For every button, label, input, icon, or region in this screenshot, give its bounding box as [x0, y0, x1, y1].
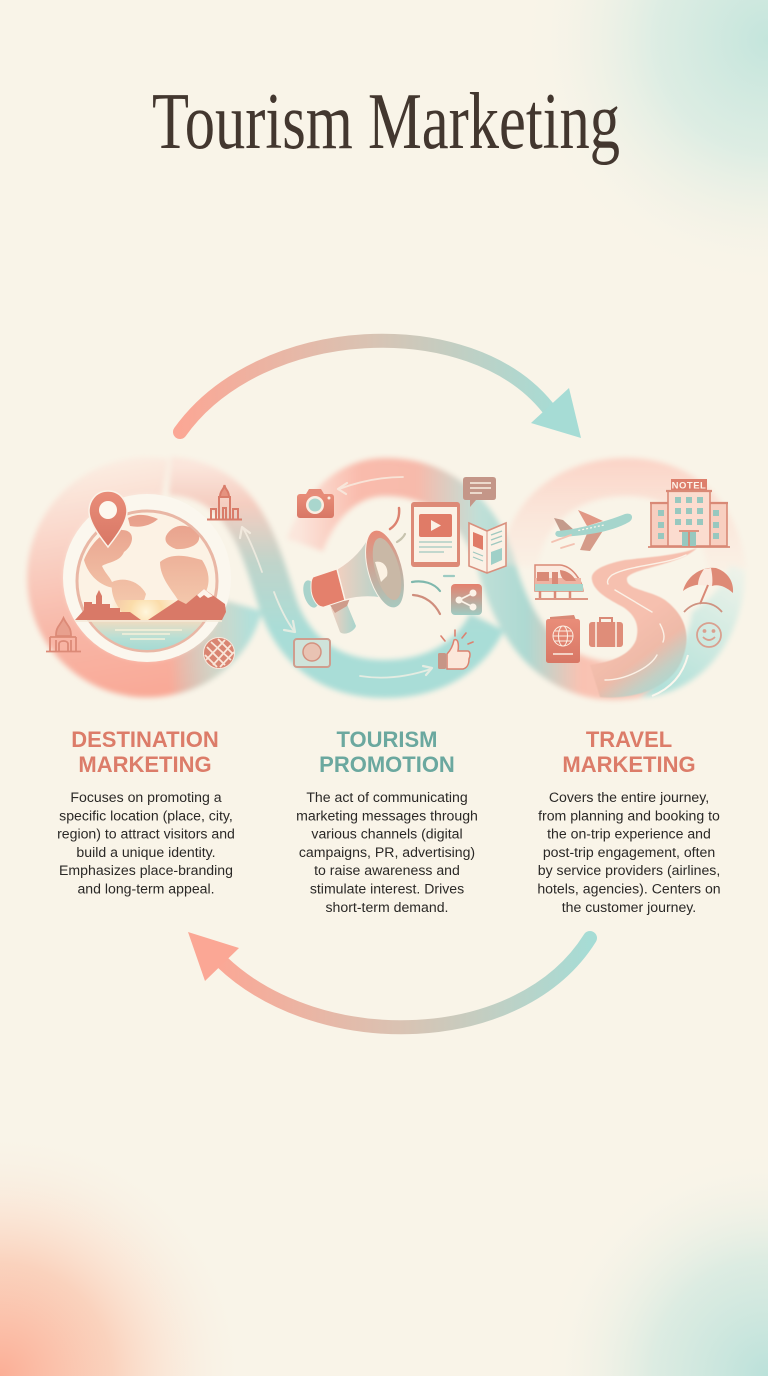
icon: tablet with video — [411, 502, 460, 567]
text: destination description: Focuses on promoting a — [70, 789, 222, 805]
column: destination marketing — [57, 727, 235, 896]
icon: brochure — [469, 523, 506, 573]
text: promotion description: campaigns, PR, advertising) — [299, 844, 475, 860]
ribbon direction arrows — [240, 477, 432, 678]
icon: chat bubble — [463, 477, 496, 507]
text: travel description: post-trip engagement, often — [543, 844, 715, 860]
icon: location pin — [89, 491, 127, 547]
icon: share — [451, 584, 482, 615]
text: promotion description: marketing messages through — [296, 807, 478, 823]
icon: hotel — [648, 479, 730, 547]
text: promotion description: various channels (digital — [311, 826, 463, 842]
text: promotion description: The act of communicating — [306, 789, 468, 805]
heading: tourism promotion: PROMOTION — [319, 752, 455, 777]
icon: megaphone — [300, 526, 412, 634]
column: tourism promotion — [296, 727, 478, 915]
text: travel description: by service providers (airlines, — [538, 862, 720, 878]
icon: passport — [546, 615, 580, 663]
title: Tourism Marketing — [152, 78, 620, 166]
sound waves — [390, 508, 454, 614]
text: promotion description: short-term demand. — [326, 899, 448, 915]
icon: train — [535, 565, 588, 599]
text: travel description: the customer journey. — [562, 899, 696, 915]
icon: landmark top — [207, 485, 242, 520]
icon: airplane — [552, 510, 632, 551]
icon: road — [590, 548, 697, 698]
text: travel description: hotels, agencies). Centers on — [537, 880, 721, 896]
text: promotion description: stimulate interest. Drives — [310, 880, 464, 896]
icon: suitcase — [589, 618, 623, 647]
infinity ribbon — [46, 476, 745, 697]
text: travel description: the on-trip experience and — [547, 826, 711, 842]
heading: destination marketing: DESTINATION — [71, 727, 219, 752]
icon: camera — [297, 489, 334, 518]
text: destination description: build a unique identity. — [76, 844, 216, 860]
icon: lattice ball — [204, 638, 234, 668]
text: travel description: Covers the entire journey, — [549, 789, 709, 805]
icon: umbrella — [683, 568, 733, 612]
icon: photo frame — [294, 639, 330, 667]
icon: domed temple — [46, 618, 81, 652]
icon: thumbs up — [438, 630, 473, 669]
text: travel description: from planning and booking to — [538, 807, 720, 823]
column: travel marketing — [537, 727, 721, 915]
text: destination description: region) to attract visitors and — [57, 826, 235, 842]
arrow: top curved arrow — [180, 341, 581, 438]
heading: travel marketing: MARKETING — [562, 752, 696, 777]
heading: tourism promotion: TOURISM — [336, 727, 438, 752]
text: destination description: and long-term appeal. — [77, 880, 215, 896]
heading: travel marketing: TRAVEL — [586, 727, 672, 752]
text: destination description: specific location (place, city, — [59, 807, 233, 823]
text: destination description: Emphasizes place-branding — [59, 862, 233, 878]
icon: globe with sunset scene — [60, 494, 234, 662]
icon: smiley — [697, 623, 721, 647]
text: promotion description: to raise awareness and — [314, 862, 460, 878]
heading: destination marketing: MARKETING — [78, 752, 212, 777]
arrow: bottom curved arrow — [188, 932, 590, 1027]
icon: hotel: NOTEL — [672, 480, 706, 492]
